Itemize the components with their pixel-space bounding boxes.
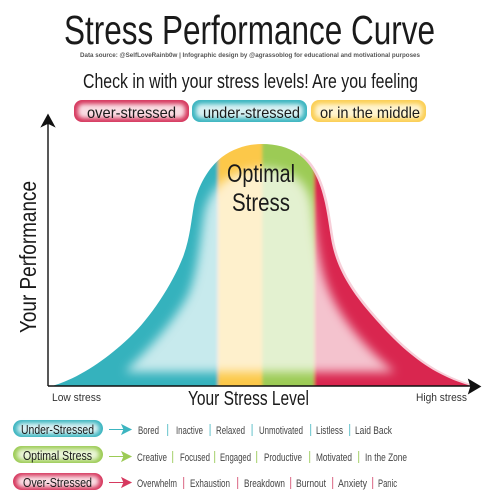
under-stressed states: Bored [138, 425, 159, 437]
under-stressed states: Relaxed [216, 425, 245, 437]
pill: over-stressed legend: Over-Stressed [23, 475, 92, 490]
under-stressed states [138, 424, 392, 437]
optimal stress label: Optimal [227, 160, 295, 188]
under-stressed states: Laid Back [355, 425, 392, 437]
optimal stress states: Focused [180, 452, 210, 464]
optimal stress states [137, 451, 407, 464]
over-stressed states [137, 477, 397, 490]
over-stressed states: Overwhelm [137, 478, 177, 490]
optimal stress states: Creative [137, 452, 167, 464]
over-stressed states: Exhaustion [190, 478, 230, 490]
pill: under-stressed [192, 100, 307, 122]
optimal stress label: Stress [232, 189, 290, 217]
legend row: optimal stress [13, 446, 407, 464]
low stress label: Low stress [52, 392, 101, 404]
pill: over-stressed: over-stressed [87, 105, 176, 122]
pill: or in the middle [311, 100, 426, 122]
optimal stress label [227, 160, 295, 217]
pill: optimal stress legend: Optimal Stress [23, 448, 92, 463]
data source line: Data source: @SelfLoveRainb0w | Infographic design by @agrassoblog for educational and motivational purposes [80, 52, 420, 59]
x axis arrow [48, 380, 480, 393]
arrow: over-stressed [109, 478, 131, 487]
x axis label: Your Stress Level [188, 388, 309, 410]
legend row: over-stressed [13, 473, 397, 490]
optimal stress states: In the Zone [365, 452, 407, 464]
optimal stress states: Motivated [316, 452, 352, 464]
pill: over-stressed [74, 100, 189, 122]
pill: under-stressed: under-stressed [203, 105, 300, 122]
over-stressed states: Anxiety [338, 478, 367, 490]
y axis label: Your Performance [15, 181, 41, 333]
optimal stress states: Engaged [220, 452, 251, 464]
stress performance curve [54, 144, 470, 386]
under-stressed states: Inactive [176, 425, 203, 437]
legend row: under-stressed [13, 420, 392, 437]
high stress label: High stress [416, 392, 467, 404]
over-stressed states: Breakdown [244, 478, 285, 490]
arrow: optimal stress [109, 452, 131, 461]
y axis arrow [42, 115, 54, 386]
pill: under-stressed legend: Under-Stressed [21, 422, 94, 437]
over-stressed states: Panic [378, 478, 397, 490]
arrow: under-stressed [109, 425, 131, 434]
optimal stress states: Productive [264, 452, 302, 464]
over-stressed states: Burnout [296, 478, 326, 490]
check-in prompt: Check in with your stress levels! Are you feeling [83, 71, 418, 93]
light inner area of curve [125, 168, 395, 372]
under-stressed states: Listless [316, 425, 343, 437]
under-stressed states: Unmotivated [259, 425, 303, 437]
pill: or in the middle: or in the middle [320, 105, 420, 122]
